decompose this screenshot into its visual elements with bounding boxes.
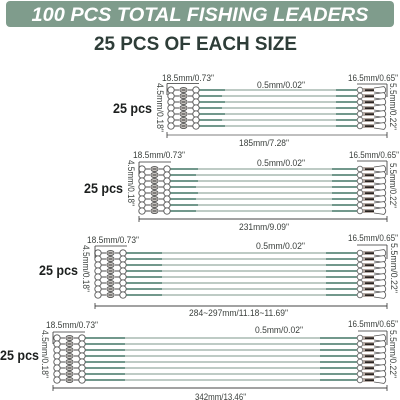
dimension marks bbox=[95, 245, 387, 309]
swivels bbox=[54, 335, 85, 383]
dimension texts: 5.5mm/0.22" bbox=[387, 163, 398, 208]
loops bbox=[357, 335, 386, 383]
dimension texts: 185mm/7.28" bbox=[239, 138, 289, 149]
dimension texts: 0.5mm/0.02" bbox=[256, 241, 305, 252]
dimension texts: 18.5mm/0.73" bbox=[133, 150, 185, 161]
dimension texts: 5.5mm/0.22" bbox=[387, 330, 398, 378]
label: quantity: 25 pcs bbox=[39, 263, 78, 278]
dimension texts: 18.5mm/0.73" bbox=[46, 320, 98, 331]
dimension marks bbox=[139, 161, 387, 222]
loops bbox=[357, 166, 386, 214]
dimension texts bbox=[80, 233, 399, 319]
dimension texts bbox=[125, 150, 399, 233]
dimension texts: 0.5mm/0.02" bbox=[257, 80, 305, 91]
panel: 231mm leader bbox=[84, 150, 399, 233]
panel: 342mm leader bbox=[0, 319, 398, 400]
swivels bbox=[95, 250, 126, 298]
dimension texts: 4.5mm/0.18" bbox=[125, 160, 136, 206]
wires bbox=[126, 253, 360, 295]
label: quantity: 25 pcs bbox=[84, 181, 123, 196]
dimension texts bbox=[39, 319, 398, 400]
dimension texts bbox=[154, 73, 398, 149]
dimension texts: 284~297mm/11.18~11.69" bbox=[189, 308, 288, 319]
dimension texts: 5.5mm/0.22" bbox=[388, 243, 399, 293]
title banner: 100 PCS TOTAL FISHING LEADERS bbox=[32, 4, 368, 26]
loops bbox=[357, 87, 386, 129]
label: quantity: 25 pcs bbox=[113, 101, 152, 116]
dimension texts: 4.5mm/0.18" bbox=[39, 330, 50, 378]
dimension texts: 4.5mm/0.18" bbox=[154, 83, 165, 132]
panel: 284-297mm leader bbox=[39, 233, 399, 319]
subtitle: 25 PCS OF EACH SIZE bbox=[94, 33, 297, 55]
dimension texts: 0.5mm/0.02" bbox=[257, 158, 305, 169]
label: quantity: 25 pcs bbox=[0, 348, 39, 363]
swivels bbox=[139, 166, 170, 214]
loops bbox=[357, 250, 386, 298]
dimension texts: 4.5mm/0.18" bbox=[80, 245, 91, 292]
dimension texts: 0.5mm/0.02" bbox=[255, 325, 303, 336]
dimension texts: 231mm/9.09" bbox=[239, 222, 289, 233]
swivels bbox=[168, 87, 199, 129]
wires bbox=[199, 90, 358, 126]
dimension texts: 5.5mm/0.22" bbox=[387, 83, 398, 130]
wires bbox=[84, 338, 360, 380]
wires bbox=[170, 169, 360, 211]
dimension marks bbox=[53, 331, 387, 391]
dimension texts: 18.5mm/0.73" bbox=[162, 73, 214, 84]
dimension marks bbox=[167, 84, 387, 138]
dimension texts: 18.5mm/0.73" bbox=[87, 235, 139, 246]
panel: 185mm leader bbox=[113, 73, 398, 149]
